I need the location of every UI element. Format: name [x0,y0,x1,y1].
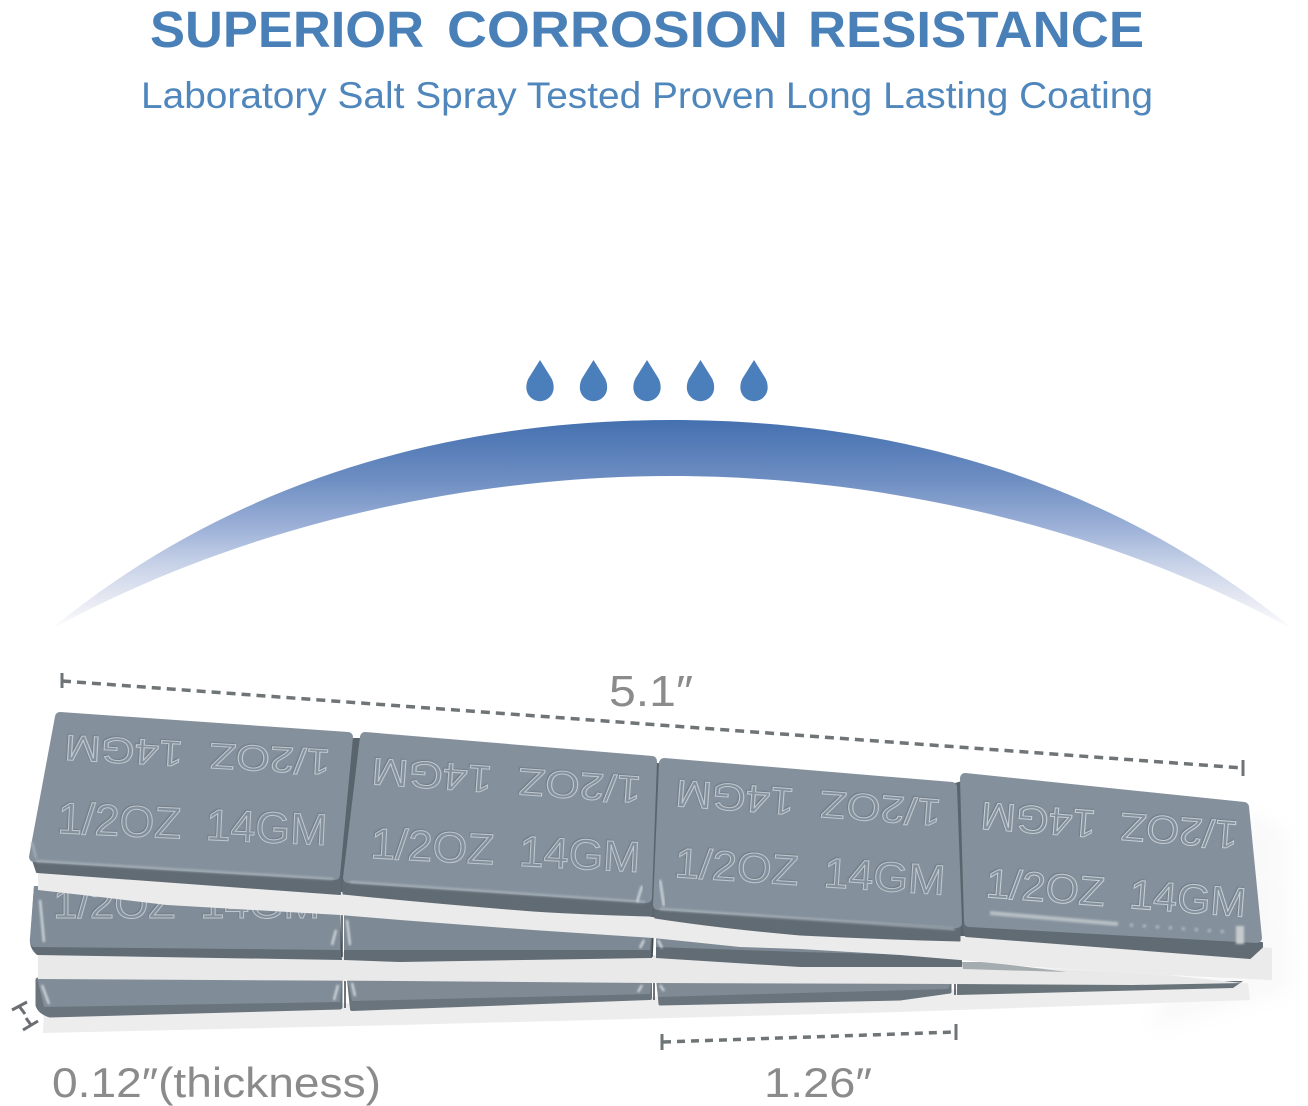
base adhesive tape [43,983,1250,1033]
seam backing between weights [336,738,968,936]
embossed marking [369,749,643,882]
weight 1 [32,717,348,894]
label: single weight length: 1.26″ [764,1059,872,1106]
title: SUPERIOR [150,1,424,58]
title: RESISTANCE [808,1,1144,58]
embossed marking [979,793,1248,926]
seams and glints [345,981,955,1008]
soft shadow [1150,810,1290,1030]
weight 2 [343,737,652,916]
peeled fourth weight edge [962,962,1100,973]
embossed marking: 1/2OZ 14GM [674,771,943,833]
weight 4 [963,778,1262,958]
label: thickness: 0.12″(thickness) [52,1059,381,1106]
embossed marking: 1/2OZ 14GM [979,793,1240,856]
title: CORROSION [447,1,788,58]
worn coating highlights [990,913,1240,944]
embossed marking: 1/2OZ 14GM [64,727,331,783]
second adhesive tape [38,950,1243,985]
weight 3 [655,763,960,941]
embossed marking: 1/2OZ 14GM [370,749,643,810]
dimension: single weight length line [662,1024,956,1050]
embossed marking: 1/2OZ 14GM [53,880,320,927]
embossed marking: 1/2OZ 14GM [57,794,328,855]
middle row of weights [30,880,1100,973]
embossed marking: 1/2OZ 14GM [369,820,642,882]
label: overall length: 5.1″ [609,667,693,716]
bottom row of weights [37,978,1243,1015]
embossed marking [57,727,331,855]
embossed marking: 1/2OZ 14GM [984,860,1248,926]
dimension: thickness marker [12,1002,38,1030]
seams and glints [342,912,653,957]
top adhesive tape [38,870,1272,980]
embossed marking [673,771,947,904]
dimension: overall length line [62,673,1243,776]
product: strip of adhesive wheel weights [30,717,1290,1033]
icon: water drops [526,360,768,401]
embossed marking: 1/2OZ 14GM [673,839,947,904]
subtitle: Laboratory Salt Spray Tested Proven Long Lasting Coating [141,75,1153,116]
arc: protective coating shield [50,420,1294,630]
